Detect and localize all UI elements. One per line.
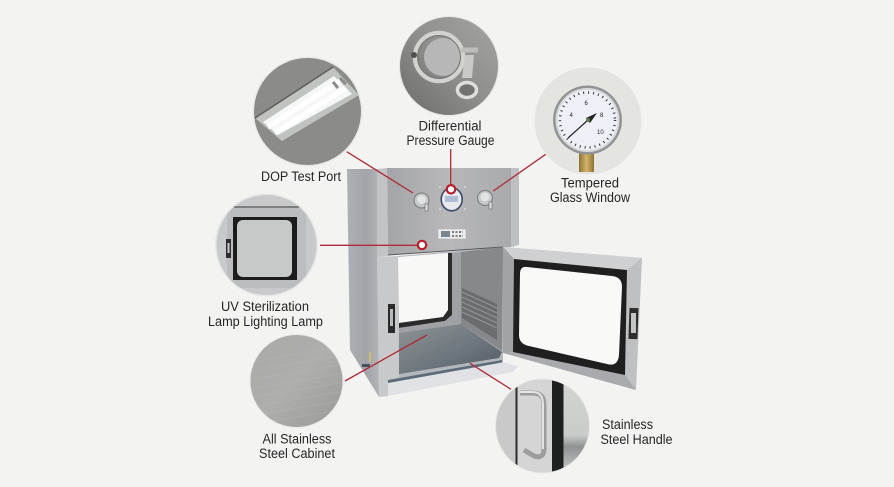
valve at cabinet base	[362, 364, 370, 367]
cabinet left latch	[388, 304, 395, 333]
callout circle: brushed steel sample	[250, 334, 345, 428]
door latch	[628, 308, 639, 339]
label: differential pressure gauge: Differential	[418, 118, 482, 134]
right valve	[478, 190, 492, 209]
connector: UV sterilization lamp	[320, 241, 426, 249]
label: stainless steel handle: Steel Handle	[600, 432, 672, 447]
opening floor	[399, 324, 502, 374]
connector: tempered glass window	[493, 154, 546, 191]
connector: stainless steel cabinet	[345, 335, 427, 381]
label: all stainless steel cabinet: All Stainless	[262, 432, 332, 446]
door black gasket	[513, 259, 627, 375]
label: stainless steel handle	[600, 417, 672, 447]
label: DOP test port: DOP Test Port	[261, 169, 341, 184]
cabinet left side panel	[347, 169, 379, 397]
label: tempered glass window: Glass Window	[550, 190, 630, 205]
connector: DOP test port	[347, 152, 413, 193]
cabinet lower front frame	[377, 256, 399, 397]
differential pressure gauge on cabinet	[439, 186, 466, 211]
opening backing	[388, 247, 503, 382]
control panel	[438, 229, 466, 239]
left valve	[414, 193, 429, 211]
opening white back window	[398, 253, 448, 323]
callout circle: sanitary clamp	[398, 16, 500, 118]
door outer frame	[503, 247, 642, 390]
pass box cabinet	[347, 168, 642, 397]
inner frame of back window	[399, 252, 462, 333]
label: differential pressure gauge: Pressure Gauge	[406, 133, 494, 148]
connector: stainless steel handle	[470, 363, 511, 389]
label: differential pressure gauge	[406, 118, 494, 148]
callout circle: pressure gauge	[534, 68, 642, 174]
label: all stainless steel cabinet: Steel Cabinet	[259, 446, 335, 461]
cabinet bottom sill	[388, 362, 518, 396]
label: stainless steel handle: Stainless	[602, 417, 653, 432]
vent grille	[462, 288, 497, 340]
infographic canvas	[209, 16, 672, 474]
black gasket of back window	[399, 253, 452, 328]
callout circle: pressure gauge: 6	[584, 101, 588, 107]
door glass window	[519, 267, 622, 365]
callout circle: fluorescent lamp	[250, 55, 365, 170]
label: UV sterilization lamp	[208, 299, 323, 329]
callout circle: pressure gauge: 10	[597, 130, 604, 136]
connector: differential pressure gauge	[447, 149, 455, 194]
cabinet front top panel	[387, 168, 511, 255]
opening interior wall	[461, 247, 503, 351]
label: UV sterilization lamp: Lamp Lighting Lamp	[208, 314, 323, 329]
gauge brass stem	[579, 152, 594, 172]
label: all stainless steel cabinet	[259, 432, 335, 461]
callout circle: stainless handle	[495, 378, 592, 474]
callout circle: window door	[215, 194, 319, 296]
callout circle: pressure gauge: 4	[570, 113, 574, 119]
label: tempered glass window: Tempered	[561, 176, 619, 190]
label: UV sterilization lamp: UV Sterilization	[221, 299, 309, 314]
callout circle: pressure gauge: 8	[600, 113, 604, 119]
label: tempered glass window	[550, 176, 630, 205]
